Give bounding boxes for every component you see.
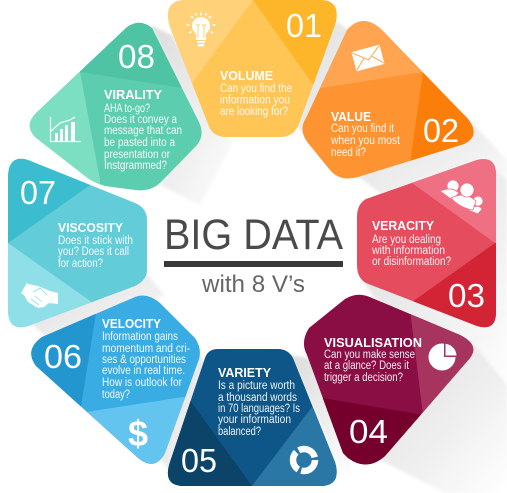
text: viscosity: for action? bbox=[58, 258, 103, 270]
icon: pie chart bbox=[428, 343, 458, 370]
number 06: 06 bbox=[44, 338, 82, 375]
text: velocity: How is outlook for bbox=[102, 377, 182, 389]
text: volume: are looking for? bbox=[220, 106, 288, 118]
panel: 04 visualisation bbox=[304, 294, 474, 464]
number 04: 04 bbox=[349, 413, 388, 450]
text: veracity: Are you dealing bbox=[372, 234, 441, 246]
text: visualisation: at a glance? Does it bbox=[324, 360, 410, 372]
icon: people bbox=[440, 180, 483, 214]
text: visualisation: Can you make sense bbox=[324, 349, 415, 361]
icon: dollar sign: $ bbox=[128, 413, 148, 454]
text: volume bbox=[220, 69, 292, 118]
icon: bar chart bbox=[50, 117, 81, 142]
text: variety: VARIETY bbox=[218, 366, 272, 380]
text: veracity: with information bbox=[371, 245, 445, 257]
text: virality: Does it convey a bbox=[104, 114, 178, 126]
text: velocity: ses & opportunities bbox=[102, 354, 186, 366]
panel shape with facets bbox=[168, 0, 337, 137]
text: virality: VIRALITY bbox=[104, 88, 163, 102]
text: value: Can you find it bbox=[331, 123, 395, 135]
subtitle: with 8 V’s bbox=[201, 271, 305, 298]
number 08: 08 bbox=[118, 38, 155, 75]
text: velocity: evolve in real time. bbox=[102, 365, 185, 377]
panel shape with facets bbox=[304, 294, 474, 464]
panel: 03 veracity bbox=[357, 159, 496, 328]
text: viscosity: VISCOSITY bbox=[58, 221, 124, 235]
number 01: 01 bbox=[286, 7, 322, 44]
panel: 01 volume bbox=[168, 0, 337, 137]
text: viscosity: you? Does it call bbox=[58, 246, 129, 258]
text: veracity: VERACITY bbox=[372, 219, 435, 233]
text: value bbox=[330, 110, 401, 159]
title underline bar bbox=[164, 261, 343, 267]
panel shape with facets bbox=[8, 158, 147, 328]
text: veracity bbox=[371, 219, 451, 268]
icon: cycle arrows bbox=[293, 449, 315, 471]
text: visualisation: trigger a decision? bbox=[324, 372, 403, 384]
panel shape with facets bbox=[168, 349, 337, 486]
text: value: need it? bbox=[331, 147, 366, 159]
panel: 05 variety bbox=[168, 349, 337, 486]
text: variety: a thousand words bbox=[218, 392, 297, 404]
text: virality: AHA to-go? bbox=[104, 103, 150, 115]
text: virality: message that can bbox=[104, 125, 182, 137]
number 05: 05 bbox=[181, 442, 217, 479]
text: volume: information you bbox=[220, 94, 290, 106]
text: value: VALUE bbox=[331, 110, 371, 124]
text: viscosity: Does it stick with bbox=[58, 235, 133, 247]
text: virality bbox=[104, 88, 182, 172]
text: volume: Can you find the bbox=[220, 83, 292, 95]
text: virality: be pasted into a bbox=[104, 137, 176, 149]
panel shape with facets bbox=[357, 159, 496, 328]
panel: 06 velocity bbox=[31, 296, 200, 464]
text: velocity: VELOCITY bbox=[102, 317, 162, 331]
text: variety: Is a picture worth bbox=[218, 380, 295, 392]
panel shape with facets bbox=[31, 296, 200, 464]
panel shape with facets bbox=[302, 21, 474, 178]
text: velocity: today? bbox=[102, 389, 130, 401]
text: viscosity bbox=[58, 221, 133, 270]
panel: 02 value bbox=[302, 21, 474, 178]
text: visualisation: VISUALISATION bbox=[324, 336, 422, 350]
text: velocity: momentum and cri- bbox=[102, 343, 190, 355]
icon: light bulb bbox=[186, 12, 216, 46]
icon: envelope bbox=[351, 45, 385, 71]
title block bbox=[164, 211, 343, 298]
panel: 07 viscosity bbox=[8, 158, 147, 328]
text: velocity bbox=[102, 317, 190, 401]
text: variety: in 70 languages? Is bbox=[218, 403, 300, 415]
number 07: 07 bbox=[20, 174, 56, 211]
text: variety: your information bbox=[218, 414, 291, 426]
text: velocity: Information gains bbox=[102, 331, 178, 343]
icon: handshake bbox=[21, 283, 58, 308]
text: variety: balanced? bbox=[218, 426, 261, 438]
panel shape with facets bbox=[30, 22, 202, 190]
text: virality: Instgrammed? bbox=[104, 160, 167, 172]
text: value: when you most bbox=[330, 135, 401, 147]
text: virality: presentation or bbox=[104, 149, 170, 161]
text: volume: VOLUME bbox=[220, 69, 273, 83]
text: variety bbox=[218, 366, 300, 438]
text: visualisation bbox=[324, 336, 422, 384]
text: veracity: or disinformation? bbox=[372, 256, 451, 268]
panel: 08 virality bbox=[30, 22, 202, 190]
title: big data: BIG DATA bbox=[164, 211, 343, 259]
number 02: 02 bbox=[423, 112, 459, 149]
number 03: 03 bbox=[448, 277, 485, 314]
